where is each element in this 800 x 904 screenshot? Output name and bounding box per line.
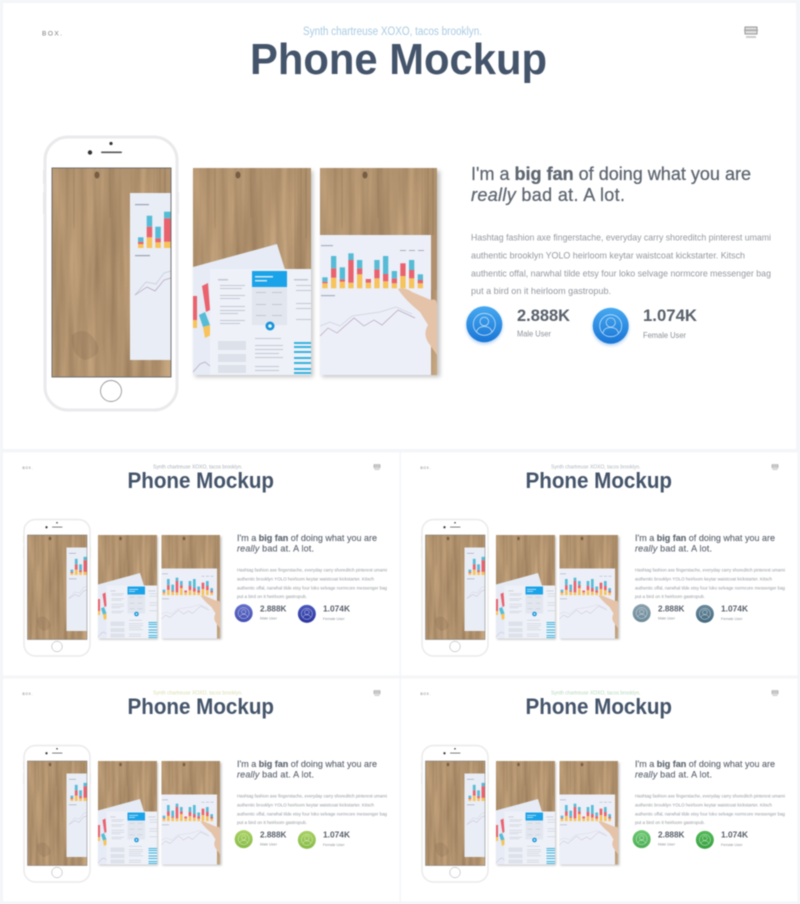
headline line two: really bad at. A lot. (237, 544, 314, 554)
body text: Hashtag fashion axe fingerstache, everyday carry shoreditch pinterest umami (471, 232, 771, 244)
body text: authentic offal, narwhal tilde etsy four loko selvage normcore messenger bag (635, 811, 785, 817)
headline: I'm a big fan of doing what you are (635, 759, 775, 769)
slide background (401, 452, 798, 676)
body text: put a bird on it heirloom gastropub. (635, 820, 705, 826)
stat: female users: Female User (721, 616, 743, 621)
stat: male users: 2.888K (517, 307, 570, 325)
brand label: BOX. (22, 692, 33, 696)
phone mockup (43, 137, 179, 410)
body text (635, 567, 785, 600)
icon: menu (772, 464, 778, 470)
stat: male users: Male User (260, 841, 278, 846)
stat: male users: Male User (260, 615, 278, 620)
title: Phone Mockup (128, 694, 274, 719)
photo: charts on wood (162, 761, 222, 866)
title: Phone Mockup (250, 35, 547, 84)
panel: green variant (401, 678, 798, 902)
photo: charts on wood (560, 761, 620, 866)
title: Phone Mockup (526, 694, 672, 719)
body text: authentic offal, narwhal tilde etsy four loko selvage normcore messenger bag (471, 268, 771, 280)
headline: I'm a big fan of doing what you are (471, 164, 751, 184)
icon: female user (593, 308, 629, 346)
photo: charts on wood (560, 535, 620, 640)
body text: Hashtag fashion axe fingerstache, everyday carry shoreditch pinterest umami (635, 567, 785, 573)
photo: resume on wood (98, 535, 158, 640)
body text: put a bird on it heirloom gastropub. (237, 820, 307, 826)
body text: authentic brooklyn YOLO heirloom keytar waistcoat kickstarter. Kitsch (635, 802, 772, 808)
slide background (3, 3, 796, 449)
stat: male users: Male User (517, 330, 551, 338)
body text: Hashtag fashion axe fingerstache, everyday carry shoreditch pinterest umami (237, 567, 387, 573)
photo: charts on wood (320, 168, 440, 377)
subtitle: Synth chartreuse XOXO, tacos brooklyn. (551, 464, 641, 470)
phone mockup (421, 520, 489, 656)
icon: female user (298, 831, 316, 849)
body text: authentic brooklyn YOLO heirloom keytar waistcoat kickstarter. Kitsch (471, 250, 745, 262)
body text: put a bird on it heirloom gastropub. (635, 594, 705, 600)
subtitle: Synth chartreuse XOXO, tacos brooklyn. (551, 690, 641, 696)
stat: male users (260, 830, 287, 846)
stat: male users: 2.888K (260, 604, 287, 614)
icon: menu (772, 690, 778, 696)
phone mockup (23, 520, 91, 656)
body text: authentic offal, narwhal tilde etsy four loko selvage normcore messenger bag (237, 811, 387, 817)
stat: female users (323, 604, 350, 621)
stat: male users (658, 604, 685, 620)
stat: female users: Female User (721, 842, 743, 847)
stat: male users: Male User (658, 615, 676, 620)
stat: male users (517, 307, 570, 338)
headline line two: really bad at. A lot. (635, 544, 712, 554)
body text: Hashtag fashion axe fingerstache, everyday carry shoreditch pinterest umami (237, 793, 387, 799)
body text: put a bird on it heirloom gastropub. (237, 594, 307, 600)
slide background (401, 678, 798, 902)
icon: male user (235, 830, 253, 848)
stat: female users: 1.074K (643, 307, 697, 325)
photo: charts on wood (162, 535, 222, 640)
title: Phone Mockup (526, 468, 672, 493)
brand label: BOX. (22, 466, 33, 470)
icon: menu (374, 464, 380, 470)
subtitle: Synth chartreuse XOXO, tacos brooklyn. (153, 464, 243, 470)
brand label: BOX. (42, 30, 62, 38)
icon: male user (633, 830, 651, 848)
stat: female users (643, 307, 697, 340)
icon: female user (298, 605, 316, 623)
headline line two: really bad at. A lot. (471, 185, 625, 205)
brand label: BOX. (420, 466, 431, 470)
brand label: BOX. (420, 692, 431, 696)
body text: authentic offal, narwhal tilde etsy four loko selvage normcore messenger bag (237, 585, 387, 591)
stat: female users: 1.074K (323, 830, 350, 840)
panel: indigo variant (3, 452, 400, 676)
photo: resume on wood (98, 761, 158, 866)
body text: authentic brooklyn YOLO heirloom keytar waistcoat kickstarter. Kitsch (237, 576, 374, 582)
icon: male user (235, 604, 253, 622)
headline line two: really bad at. A lot. (635, 770, 712, 780)
stat: female users: Female User (643, 331, 686, 340)
headline: I'm a big fan of doing what you are (237, 533, 377, 543)
icon: menu (744, 27, 758, 38)
headline: I'm a big fan of doing what you are (635, 533, 775, 543)
stat: female users (721, 604, 748, 621)
stat: female users: 1.074K (721, 604, 748, 614)
stat: male users: 2.888K (260, 830, 287, 840)
photo: resume on wood (496, 761, 556, 866)
icon: female user (696, 605, 714, 623)
panel: lime variant (3, 678, 400, 902)
slide background (3, 678, 400, 902)
body text (237, 793, 387, 826)
stat: female users: Female User (323, 616, 345, 621)
subtitle: Synth chartreuse XOXO, tacos brooklyn. (153, 690, 243, 696)
body text: authentic brooklyn YOLO heirloom keytar waistcoat kickstarter. Kitsch (635, 576, 772, 582)
stat: male users: 2.888K (658, 830, 685, 840)
stat: male users: 2.888K (658, 604, 685, 614)
stat: male users: Male User (658, 841, 676, 846)
stat: male users (260, 604, 287, 620)
stat: male users (658, 830, 685, 846)
photo: resume on wood (193, 168, 313, 377)
stat: female users (721, 830, 748, 847)
stat: female users: Female User (323, 842, 345, 847)
stat: female users: 1.074K (721, 830, 748, 840)
icon: menu (374, 690, 380, 696)
body text: authentic brooklyn YOLO heirloom keytar waistcoat kickstarter. Kitsch (237, 802, 374, 808)
panel: slate variant (401, 452, 798, 676)
subtitle: Synth chartreuse XOXO, tacos brooklyn. (303, 26, 482, 38)
icon: male user (633, 604, 651, 622)
headline line two: really bad at. A lot. (237, 770, 314, 780)
body text: put a bird on it heirloom gastropub. (471, 286, 611, 297)
stat: female users: 1.074K (323, 604, 350, 614)
photo: resume on wood (496, 535, 556, 640)
body text (635, 793, 785, 826)
icon: female user (696, 831, 714, 849)
phone mockup (23, 746, 91, 882)
panel: main slide (3, 3, 796, 449)
phone mockup (421, 746, 489, 882)
body text: authentic offal, narwhal tilde etsy four loko selvage normcore messenger bag (635, 585, 785, 591)
headline: I'm a big fan of doing what you are (237, 759, 377, 769)
title: Phone Mockup (128, 468, 274, 493)
icon: male user (466, 306, 502, 344)
stat: female users (323, 830, 350, 847)
body text: Hashtag fashion axe fingerstache, everyday carry shoreditch pinterest umami (635, 793, 785, 799)
body text (471, 232, 771, 297)
body text (237, 567, 387, 600)
slide background (3, 452, 400, 676)
